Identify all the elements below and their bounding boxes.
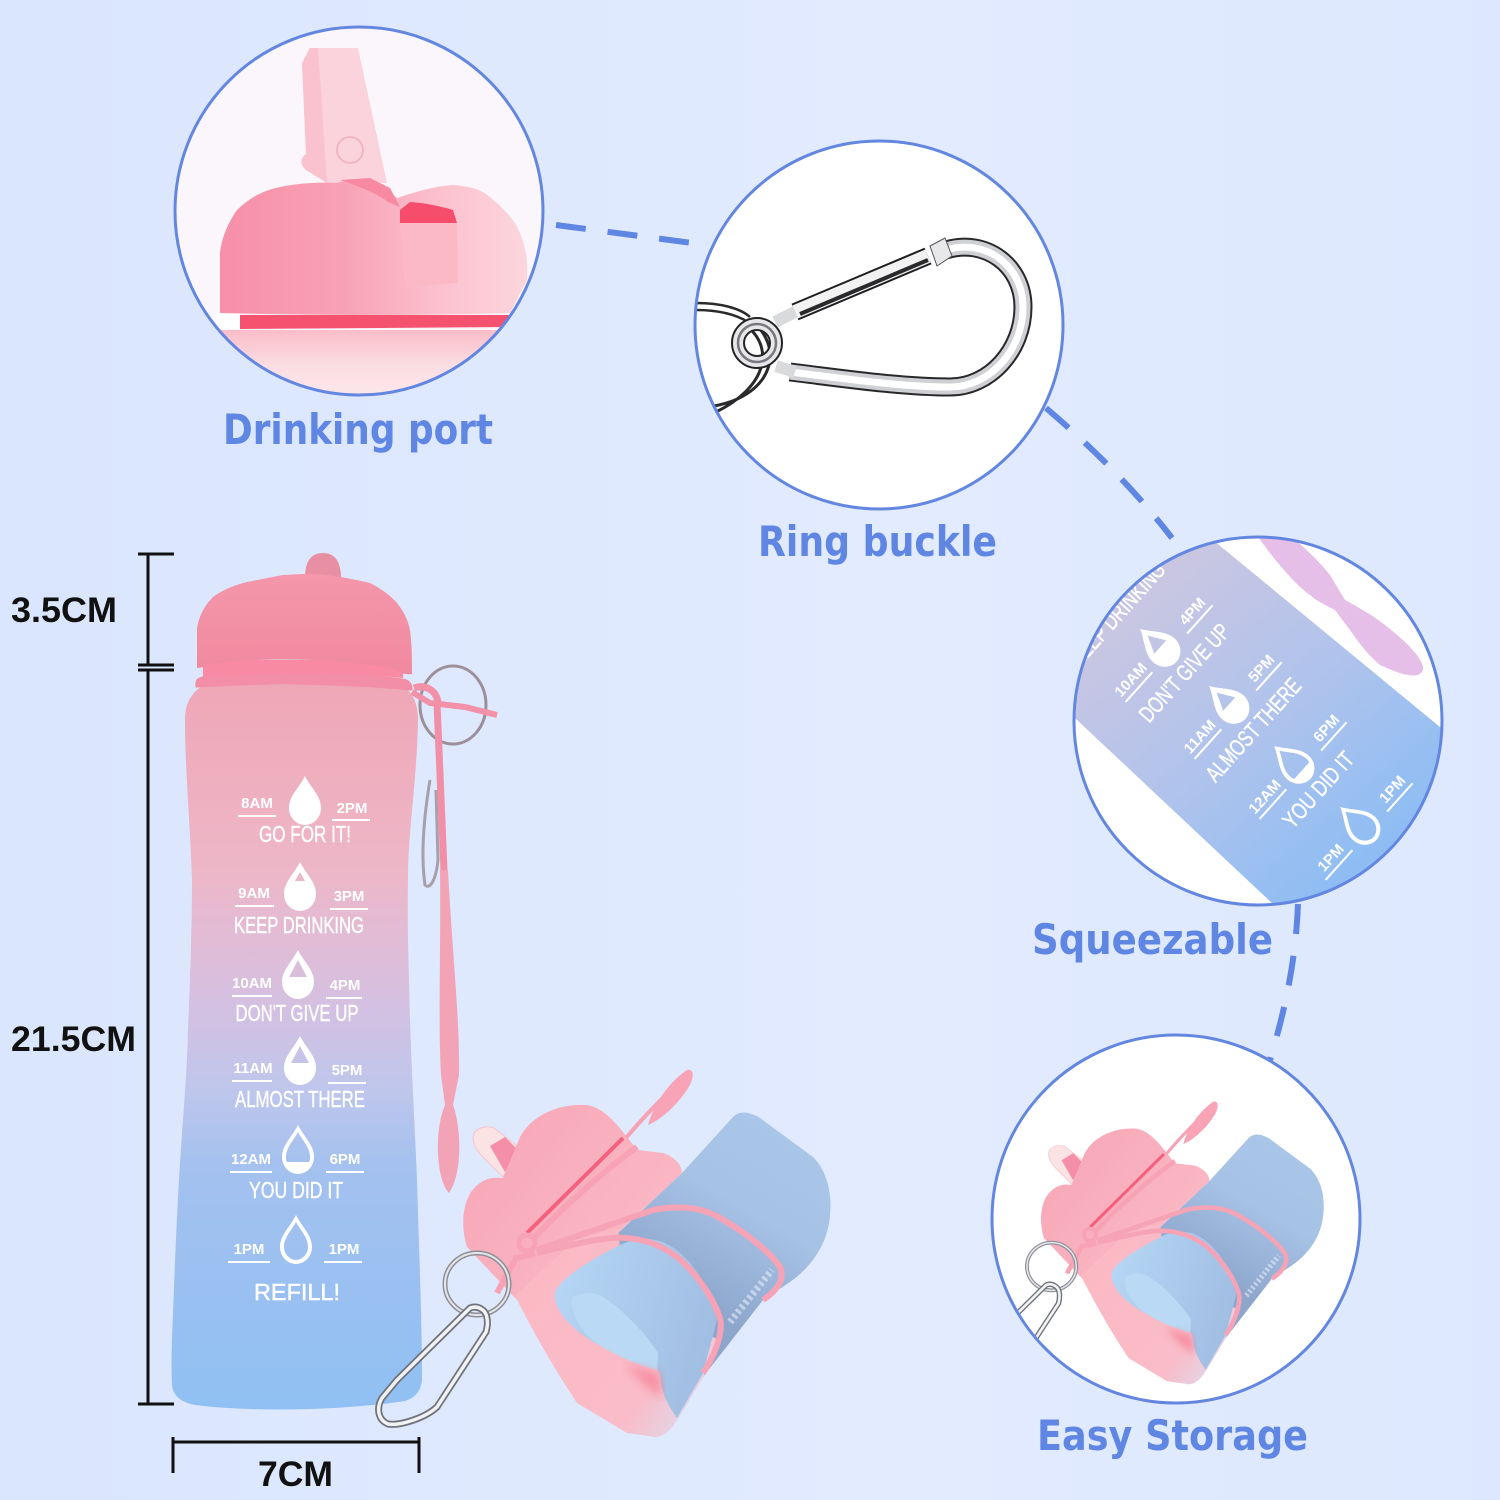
marking: 11AM 5PM almost there <box>232 1036 366 1112</box>
marking: 8AM 2PM go for it: 8AM <box>241 795 273 812</box>
label: Easy Storage: Easy Storage <box>1037 1411 1308 1460</box>
marking: 11AM 5PM almost there: 5PM <box>332 1062 362 1079</box>
volume markings <box>228 776 370 1305</box>
marking: 1PM 1PM refill <box>228 1215 362 1305</box>
circle: drinking port <box>174 26 544 400</box>
marking: 12AM 6PM you did it: YOU DID IT <box>249 1177 343 1203</box>
dimension: cap height 3.5CM <box>11 554 174 670</box>
lanyard strap <box>412 666 497 1193</box>
marking: 10AM 4PM don't give up: DON'T GIVE UP <box>236 1000 358 1026</box>
circle: squeezable: 1PM <box>1315 841 1348 875</box>
circle: squeezable: 4PM <box>1176 595 1209 629</box>
marking: 9AM 3PM keep drinking: 3PM <box>334 888 364 905</box>
marking: 1PM 1PM refill: REFILL! <box>254 1279 340 1305</box>
marking: 8AM 2PM go for it: GO FOR IT! <box>259 821 351 847</box>
neck <box>203 660 403 678</box>
dimension: cap height 3.5CM: 3.5CM <box>11 591 117 630</box>
marking: 9AM 3PM keep drinking: 9AM <box>238 885 270 902</box>
dimension: body height 21.5CM <box>11 670 174 1404</box>
dimension: width 7CM <box>173 1437 419 1494</box>
dimension: width 7CM: 7CM <box>258 1455 333 1494</box>
marking: 1PM 1PM refill: 1PM <box>234 1241 264 1258</box>
marking: 12AM 6PM you did it <box>230 1125 364 1203</box>
marking: 12AM 6PM you did it: 12AM <box>231 1151 271 1168</box>
bottle body <box>172 685 422 1410</box>
circle: squeezable: 12AM <box>1245 776 1285 818</box>
marking: 8AM 2PM go for it <box>238 776 370 847</box>
marking: 12AM 6PM you did it: 6PM <box>330 1151 360 1168</box>
circle: squeezable: YOU DID IT <box>1277 746 1359 833</box>
marking: 11AM 5PM almost there: 11AM <box>233 1060 273 1077</box>
circle: squeezable: DON'T GIVE UP <box>1133 618 1235 727</box>
circle: easy storage <box>976 1034 1361 1404</box>
bottle cap tab <box>305 553 341 578</box>
marking: 9AM 3PM keep drinking: KEEP DRINKING <box>234 912 364 938</box>
circle: squeezable: 1PM <box>1376 773 1409 807</box>
marking: 8AM 2PM go for it: 2PM <box>337 800 367 817</box>
bottle cap <box>197 574 412 674</box>
bottle neck ring <box>197 674 411 689</box>
circle: squeezable: REFILL! <box>1355 814 1432 896</box>
circle: squeezable: 6PM <box>1310 712 1343 746</box>
marking: 1PM 1PM refill: 1PM <box>329 1241 359 1258</box>
marking: 10AM 4PM don't give up: 10AM <box>232 975 272 992</box>
dashed connector: port to buckle <box>556 225 692 243</box>
circle: squeezable: 11AM <box>1181 717 1220 757</box>
label: Drinking port: Drinking port <box>223 405 493 454</box>
circle: ring buckle <box>695 141 1063 509</box>
dashed connector: squeezable to storage <box>1270 904 1298 1060</box>
rolled bottle <box>379 1070 830 1437</box>
main bottle <box>172 553 497 1410</box>
marking: 10AM 4PM don't give up: 4PM <box>330 977 360 994</box>
marking: 10AM 4PM don't give up <box>232 950 362 1026</box>
marking: 11AM 5PM almost there: ALMOST THERE <box>235 1086 365 1112</box>
circle: squeezable: 10AM <box>1111 659 1151 701</box>
circle: squeezable: ALMOST THERE <box>1200 673 1306 787</box>
dimension: body height 21.5CM: 21.5CM <box>11 1020 136 1059</box>
circle: squeezable: KEEP DRINKING <box>1064 557 1170 671</box>
label: Squeezable: Squeezable <box>1032 915 1273 964</box>
circle: squeezable: 5PM <box>1245 652 1278 686</box>
dashed connector: buckle to squeezable <box>1046 408 1172 538</box>
circle: squeezable <box>1072 536 1444 906</box>
label: Ring buckle: Ring buckle <box>758 517 997 566</box>
marking: 9AM 3PM keep drinking <box>234 862 368 938</box>
